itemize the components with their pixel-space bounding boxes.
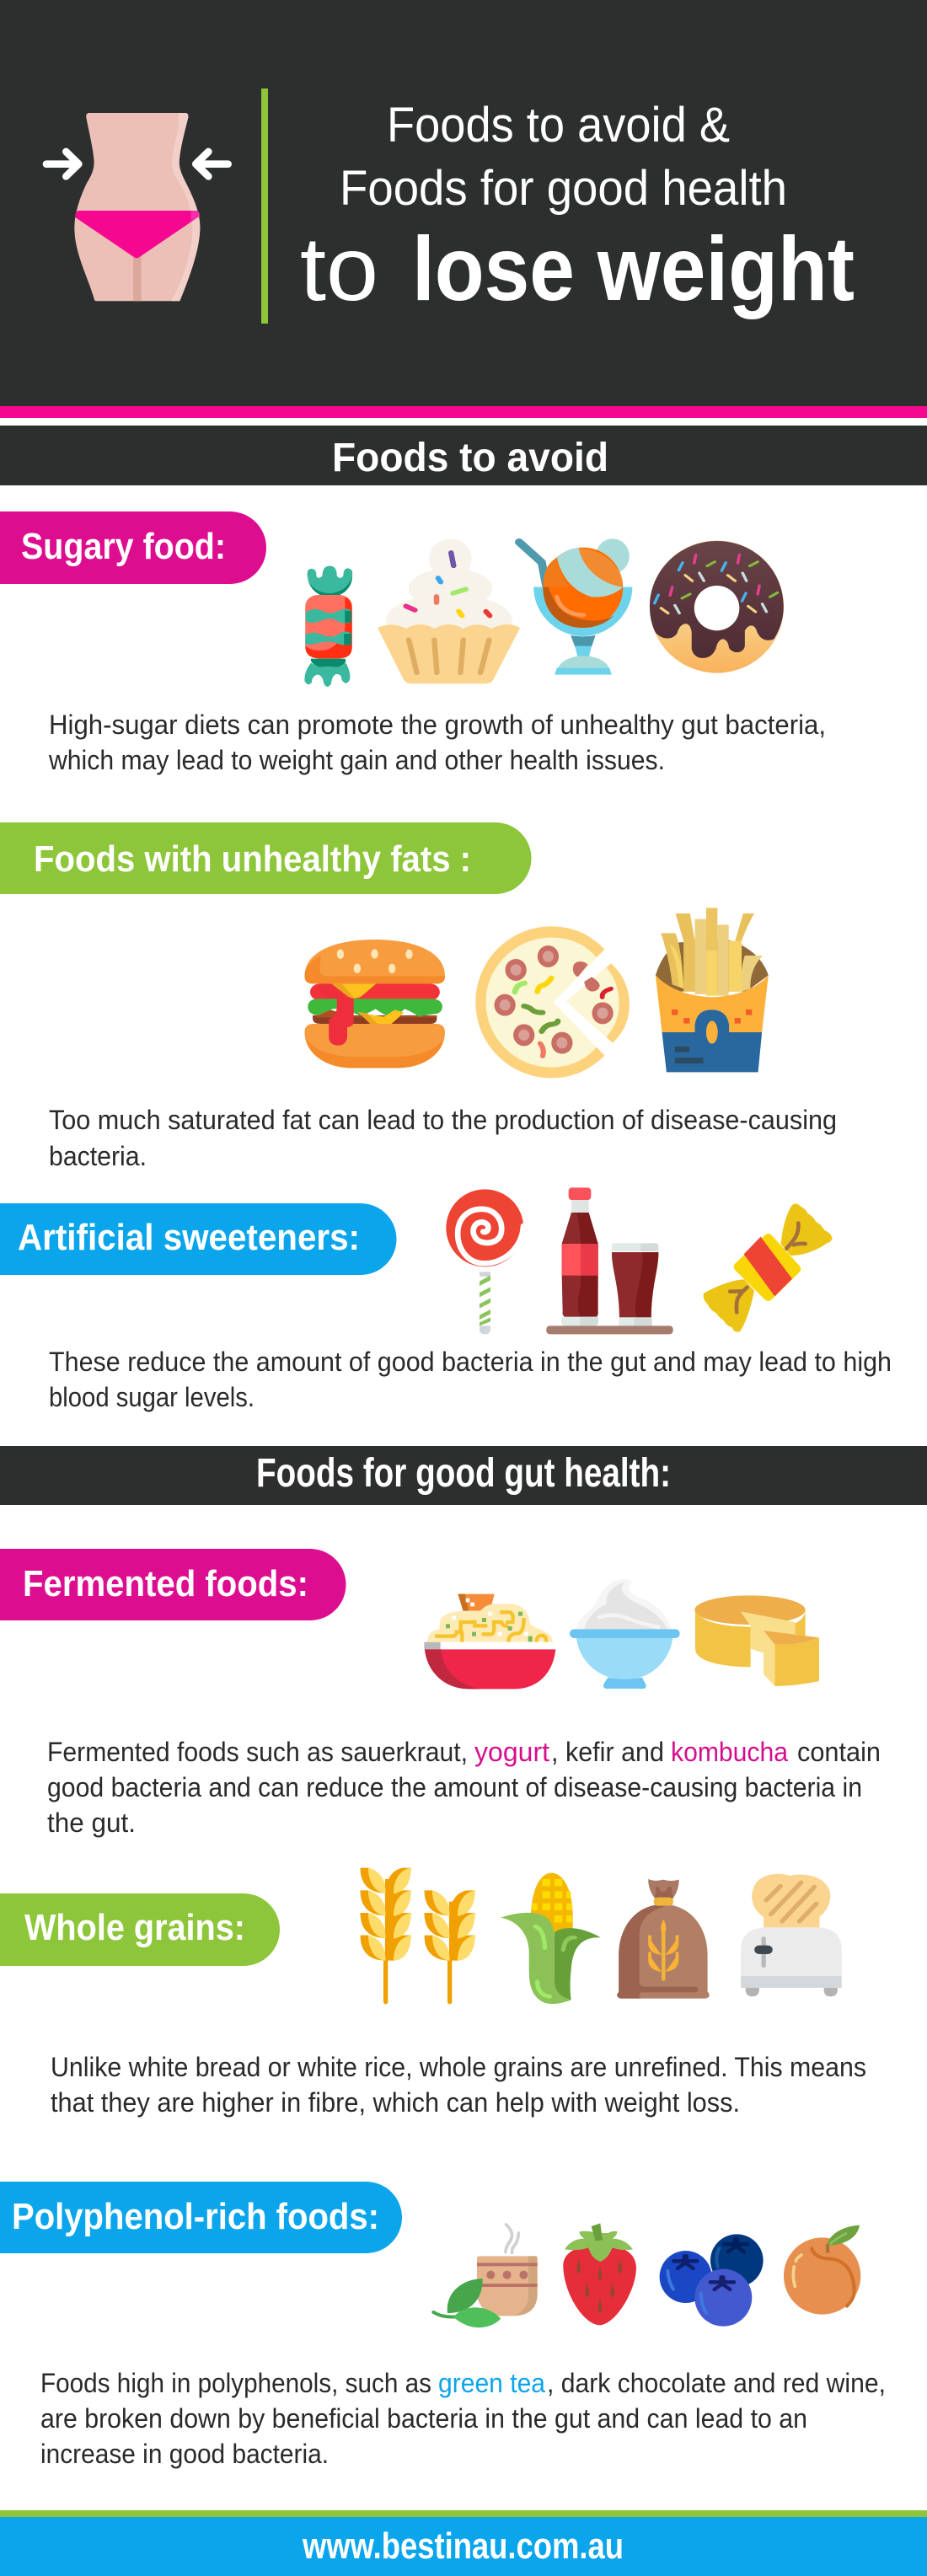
description: sugary food bbox=[48, 710, 826, 775]
section band: Foods for good gut health: Foods for good gut health: bbox=[256, 1451, 671, 1496]
description: unhealthy fats: Too much saturated fat can lead to the production of disease-causing bbox=[49, 1105, 837, 1135]
description: artificial sweeteners: blood sugar levels. bbox=[49, 1382, 255, 1412]
description: fermented foods: yogurt bbox=[474, 1737, 549, 1767]
description: unhealthy fats bbox=[49, 1105, 837, 1171]
icon: cupcake bbox=[378, 538, 520, 683]
description: artificial sweeteners: These reduce the amount of good bacteria in the gut and may lead to high bbox=[49, 1347, 892, 1377]
icon: burger bbox=[304, 940, 445, 1068]
pill heading: unhealthy fats bbox=[0, 822, 531, 894]
description: fermented foods: Fermented foods such as sauerkraut, bbox=[47, 1737, 468, 1767]
icon: tea cup with leaves bbox=[433, 2225, 538, 2327]
icon: cola bottle, glass and tray bbox=[546, 1187, 673, 1334]
description: fermented foods: good bacteria and can reduce the amount of disease-causing bacteria in bbox=[47, 1772, 862, 1802]
description: artificial sweeteners bbox=[49, 1347, 892, 1412]
title bbox=[300, 98, 855, 319]
description: polyphenol-rich foods: increase in good bacteria. bbox=[40, 2439, 329, 2469]
description: whole grains bbox=[51, 2052, 866, 2118]
icon: grain sack bbox=[617, 1879, 710, 1999]
description: whole grains: that they are higher in fibre, which can help with weight loss. bbox=[51, 2087, 740, 2118]
pill heading: Fermented foods bbox=[0, 1549, 346, 1620]
icon: yellow wrapped candy bbox=[704, 1203, 833, 1332]
pill heading: Polyphenol-rich foods bbox=[0, 2182, 402, 2253]
icon: wheat stalk small bbox=[425, 1890, 475, 2004]
description: fermented foods: kombucha bbox=[671, 1737, 788, 1767]
icon: cheese bbox=[694, 1595, 819, 1686]
pill heading: unhealthy fats: Foods with unhealthy fats : bbox=[34, 838, 471, 880]
description: polyphenol-rich foods: , dark chocolate and red wine, bbox=[547, 2368, 886, 2398]
header panel bbox=[0, 0, 927, 418]
pill heading: Artificial sweeteners: Artificial sweeteners: bbox=[18, 1217, 360, 1258]
icon: chocolate donut bbox=[650, 540, 784, 673]
green divider bbox=[261, 88, 268, 324]
footer band bbox=[0, 2510, 927, 2576]
icon: strawberry bbox=[563, 2223, 636, 2325]
icon: yogurt bowl bbox=[570, 1579, 680, 1689]
section band: Foods to avoid bbox=[0, 426, 927, 485]
arrow right bbox=[196, 152, 228, 176]
icon: pizza bbox=[475, 926, 630, 1078]
title: Foods to avoid & bbox=[387, 98, 730, 153]
icon: noodle bowl bbox=[424, 1594, 555, 1689]
description: polyphenol-rich foods: Foods high in polyphenols, such as bbox=[40, 2368, 431, 2398]
description: polyphenol-rich foods bbox=[40, 2368, 886, 2469]
description: fermented foods bbox=[47, 1737, 881, 1838]
pill heading: Sugary food bbox=[0, 511, 266, 584]
description: unhealthy fats: bacteria. bbox=[49, 1141, 147, 1171]
icon: lollipop bbox=[446, 1189, 523, 1334]
description: fermented foods: the gut. bbox=[47, 1807, 136, 1838]
icon: wheat stalk large bbox=[361, 1868, 411, 2004]
section band: Foods for good gut health bbox=[0, 1446, 927, 1505]
icon: french fries bbox=[656, 908, 769, 1072]
icon: peach bbox=[784, 2225, 860, 2315]
description: polyphenol-rich foods: are broken down by beneficial bacteria in the gut and can lead to an bbox=[40, 2403, 807, 2434]
title: Foods for good health bbox=[340, 161, 787, 216]
pink header stripe bbox=[0, 406, 927, 418]
title: lose weight bbox=[412, 217, 855, 319]
description: whole grains: Unlike white bread or white rice, whole grains are unrefined. This means bbox=[51, 2052, 866, 2082]
section band: Foods to avoid: Foods to avoid bbox=[332, 436, 608, 480]
description: sugary food: High-sugar diets can promote the growth of unhealthy gut bacteria, bbox=[49, 710, 826, 740]
footer band: www.bestinau.com.au bbox=[302, 2525, 624, 2567]
description: polyphenol-rich foods: green tea bbox=[438, 2368, 545, 2398]
icon: corn bbox=[501, 1873, 601, 2004]
pill heading: Sugary food: Sugary food: bbox=[21, 526, 226, 567]
pill heading: Whole grains bbox=[0, 1893, 280, 1966]
description: sugary food: which may lead to weight gain and other health issues. bbox=[48, 745, 665, 775]
description: fermented foods: contain bbox=[797, 1737, 881, 1767]
icon: toaster bbox=[741, 1874, 842, 1996]
pill heading: Artificial sweeteners bbox=[0, 1203, 396, 1275]
pill heading: Fermented foods: Fermented foods: bbox=[23, 1563, 308, 1604]
icon: wrapped candy bbox=[304, 566, 352, 687]
icon: blueberries bbox=[660, 2234, 764, 2327]
title: to bbox=[300, 217, 378, 319]
arrow left bbox=[46, 152, 78, 176]
pill heading: Polyphenol-rich foods: Polyphenol-rich foods: bbox=[12, 2196, 379, 2237]
description: fermented foods: , kefir and bbox=[551, 1737, 664, 1767]
icon: waist torso with arrows bbox=[46, 113, 228, 301]
icon: ice cream sundae bbox=[519, 538, 632, 675]
pill heading: Whole grains: Whole grains: bbox=[24, 1907, 245, 1948]
